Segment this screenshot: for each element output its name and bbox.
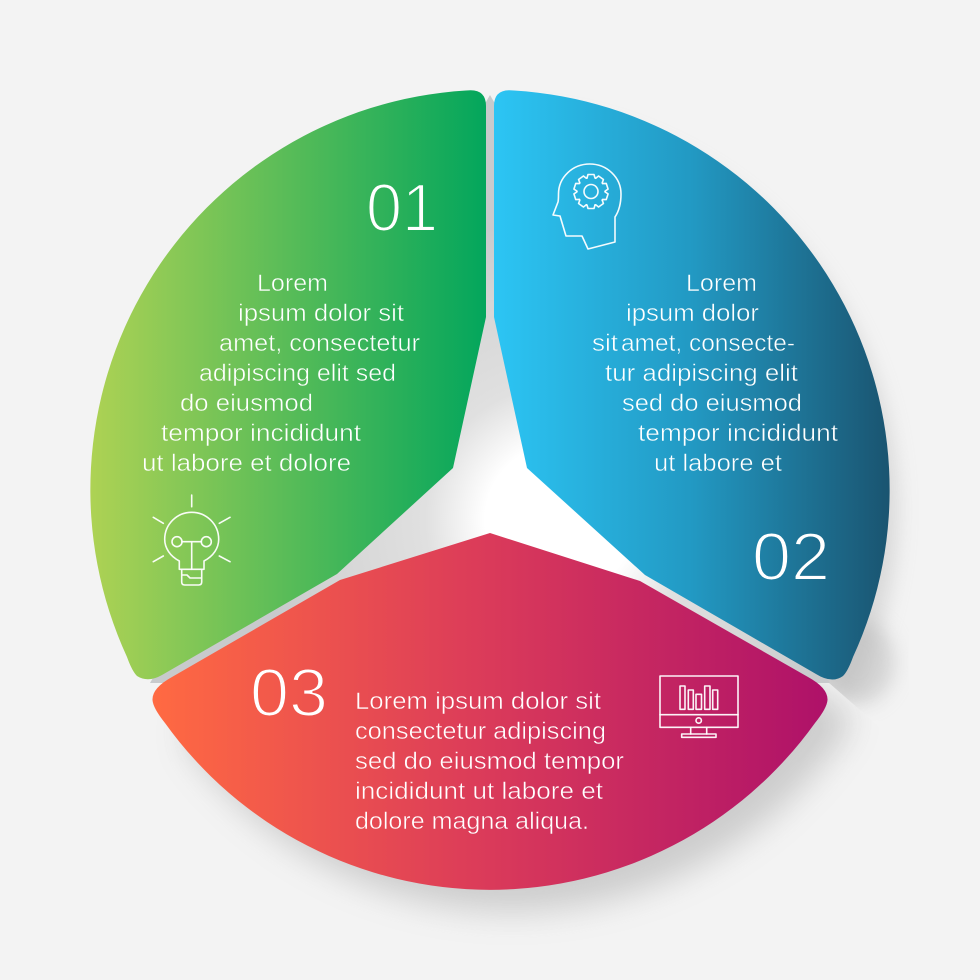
segment: green — [90, 90, 486, 679]
text block: red: incididunt ut labore et — [355, 778, 603, 805]
text block: green: ut labore et dolore — [142, 450, 351, 477]
text block: red: consectetur adipiscing — [355, 718, 606, 745]
text block: blue: sit — [592, 330, 618, 357]
text block: green: do eiusmod — [180, 390, 313, 417]
text block: blue: ipsum dolor — [626, 300, 759, 327]
text block: blue — [592, 270, 838, 477]
number 01: 01 — [366, 170, 438, 246]
text block: red: sed do eiusmod tempor — [355, 748, 624, 775]
centre gap underlay — [150, 95, 830, 683]
shadow: red segment — [178, 683, 856, 924]
shadow: blue segment — [828, 277, 902, 710]
segment: blue — [494, 90, 890, 680]
text block: blue: Lorem — [686, 270, 757, 297]
number 03: 03 — [250, 655, 328, 731]
text block: green: adipiscing elit sed — [199, 360, 396, 387]
icon: light bulb — [153, 495, 230, 585]
text block: blue: sed do eiusmod — [622, 390, 802, 417]
text block: blue: amet, consecte- — [621, 330, 795, 357]
panel: 03 red — [152, 533, 828, 890]
text block: blue: tur adipiscing elit — [605, 360, 798, 387]
number 02: 02 — [752, 519, 830, 595]
text block: red: dolore magna aliqua. — [355, 808, 589, 835]
panel: 01 green — [90, 90, 486, 679]
icon: monitor with bar chart — [660, 676, 738, 737]
text block: green — [142, 270, 420, 477]
panel: 02 blue — [494, 90, 890, 680]
text block: red — [355, 688, 624, 835]
text block: blue: ut labore et — [654, 450, 782, 477]
icon: head with gear — [553, 164, 621, 249]
text block: green: Lorem — [257, 270, 328, 297]
text block: red: Lorem ipsum dolor sit — [355, 688, 601, 715]
segment: red — [152, 533, 828, 890]
text block: green: tempor incididunt — [161, 420, 361, 447]
text block: green: amet, consectetur — [219, 330, 420, 357]
text block: blue: tempor incididunt — [638, 420, 838, 447]
text block: green: ipsum dolor sit — [238, 300, 404, 327]
